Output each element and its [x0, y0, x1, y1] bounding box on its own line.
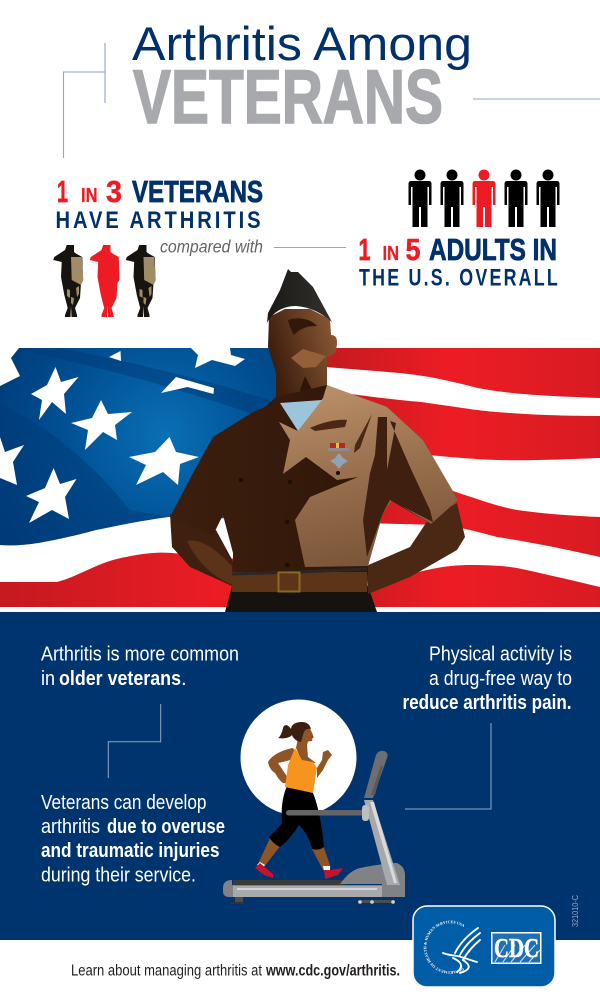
statistic: 1 in 3 veterans: VETERANS	[132, 174, 263, 209]
document code: 321010-C	[570, 895, 580, 927]
logo: rounded badge	[413, 906, 555, 987]
logo: CDC box: CDC	[494, 933, 539, 963]
text: older veterans	[41, 642, 239, 690]
footer text	[71, 962, 400, 980]
text: physical activity: reduce arthritis pain.	[402, 691, 572, 714]
title: Arthritis Among	[132, 17, 472, 70]
logo: HHS ring text: DEPARTMENT OF HEALTH & HUMAN SERVICES USA	[424, 920, 464, 974]
soldier: shirt	[170, 385, 458, 575]
icon: spotlight circle	[240, 700, 356, 816]
flag: stars	[0, 348, 245, 523]
icons: people, one in five	[408, 170, 560, 227]
text: older veterans: .	[181, 667, 187, 690]
statistic: 1 in 3 veterans: 3	[106, 174, 122, 209]
icons: saluting soldiers, one in three	[53, 245, 156, 317]
statistic: 1 in 3 veterans: 1	[57, 174, 68, 209]
soldier: sleeve shadows	[363, 417, 433, 557]
title	[132, 17, 472, 140]
woman: neck and chest	[296, 738, 316, 763]
text: physical activity: Physical activity is	[429, 642, 572, 666]
text: overuse and injuries: Veterans can develop	[41, 791, 206, 814]
soldier	[170, 269, 465, 612]
soldier: buttons	[239, 471, 340, 567]
text: overuse and injuries: due to overuse	[107, 815, 225, 838]
soldier: neck and face	[268, 309, 340, 400]
panel: blue background	[0, 612, 600, 940]
statistic: 1 in 3 veterans: IN	[81, 185, 98, 207]
woman: back arm	[268, 748, 298, 783]
text: older veterans: Arthritis is more common	[41, 642, 239, 666]
woman: black capris	[269, 786, 324, 850]
text: overuse and injuries: arthritis	[41, 815, 100, 838]
soldier: arms	[170, 514, 235, 586]
logo: HHS eagle	[443, 928, 480, 973]
text: physical activity	[402, 642, 572, 714]
text: physical activity: a drug-free way to	[429, 667, 572, 690]
flag	[0, 348, 600, 607]
woman: legs	[258, 838, 281, 867]
statistic: 1 in 5 adults: 1	[358, 232, 370, 267]
woman: face	[297, 724, 313, 742]
soldier: belt	[232, 569, 367, 592]
statistic: 1 in 5 adults: IN	[382, 243, 399, 265]
statistic: 1 in 3 veterans	[56, 174, 264, 234]
woman: orange top	[285, 748, 317, 793]
soldier: undershirt	[280, 400, 322, 431]
footer text: Learn about managing arthritis at	[71, 962, 263, 980]
soldier: pants	[225, 586, 377, 612]
footer text: www.cdc.gov/arthritis.	[265, 962, 400, 980]
woman: front arm	[317, 750, 332, 778]
treadmill	[223, 751, 405, 904]
soldier: cap	[267, 269, 332, 323]
woman walking	[255, 722, 343, 879]
text: overuse and injuries: and traumatic injuries	[41, 839, 220, 862]
woman: hair	[291, 722, 311, 742]
flag: canton folds	[0, 348, 270, 560]
flag: lower red stripe	[0, 553, 250, 607]
text: overuse and injuries	[41, 791, 225, 886]
woman: socks and shoes	[257, 862, 265, 868]
text: older veterans: older veterans	[59, 667, 181, 690]
flag: red stripes right	[290, 348, 600, 557]
statistic: 1 in 5 adults: ADULTS IN	[429, 232, 557, 267]
statistic: 1 in 5 adults: 5	[406, 232, 420, 267]
compared with label: compared with	[160, 236, 263, 256]
text: older veterans: in	[41, 667, 55, 690]
logo: CDC and HHS	[412, 905, 556, 986]
flag: blue canton	[0, 348, 300, 545]
text: overuse and injuries: during their service.	[41, 864, 196, 886]
statistic: 1 in 3 veterans: HAVE ARTHRITIS	[56, 207, 264, 234]
statistic: 1 in 5 adults	[358, 232, 560, 292]
soldier: lit shirt area	[279, 385, 458, 567]
title: VETERANS	[133, 55, 443, 140]
soldier: medal	[328, 443, 349, 469]
